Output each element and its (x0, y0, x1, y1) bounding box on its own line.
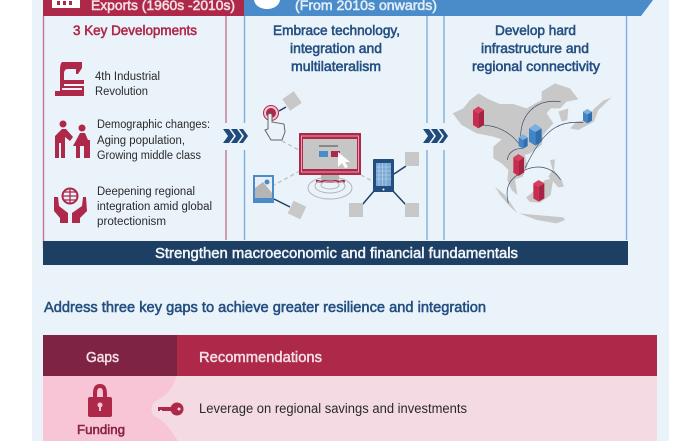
banner: strengthen fundamentals (43, 241, 628, 265)
table header: recommendations (177, 335, 657, 376)
icon: padlock (88, 384, 112, 417)
heading: develop hard infrastructure (472, 22, 600, 74)
text: leverage recommendation: Leverage on regional savings and investments (199, 401, 467, 416)
tablet (373, 159, 394, 192)
icon: industrial robot machine (55, 62, 84, 96)
panel: exports era header (43, 0, 244, 16)
text: funding label: Funding (77, 422, 125, 437)
text: 4th industrial revolution: 4th Industrial (95, 71, 160, 83)
text: deepening regional integration: Deepening regional (97, 186, 195, 198)
heading: embrace technology: Embrace technology, (273, 22, 400, 38)
text: demographic changes (97, 119, 210, 162)
text: deepening regional integration: protectionism (97, 216, 166, 228)
heading: 3 key developments: 3 Key Developments (73, 22, 197, 38)
text: 4th industrial revolution (95, 71, 160, 98)
heading: develop hard infrastructure: regional connectivity (472, 58, 600, 74)
text: demographic changes: Demographic changes: (97, 119, 210, 131)
heading: develop hard infrastructure: Develop hard (495, 22, 576, 38)
icon: key (158, 402, 184, 416)
panel: from 2010s header (244, 0, 653, 16)
text: deepening regional integration: integration amid global (97, 201, 212, 213)
arrow: chevrons to technology (223, 129, 248, 143)
table header: gaps: Gaps (86, 350, 119, 366)
row: funding gap cell (43, 376, 178, 441)
text: demographic changes: Growing middle class (97, 150, 201, 162)
heading: embrace technology: integration and (290, 40, 382, 56)
table header: gaps (43, 335, 177, 376)
heading: embrace technology (273, 22, 400, 74)
illustration: technology network (253, 91, 419, 219)
text: 4th industrial revolution: Revolution (95, 86, 148, 98)
table header: recommendations: Recommendations (199, 350, 322, 366)
icon: elderly couple (55, 120, 90, 158)
heading: embrace technology: multilateralism (291, 58, 381, 74)
banner: strengthen fundamentals: Strengthen macroeconomic and financial fundamentals (155, 246, 518, 262)
row: funding recommendation background (43, 376, 657, 441)
map: asia connectivity (453, 83, 612, 223)
photo (253, 175, 274, 203)
text: demographic changes: Aging population, (97, 135, 185, 147)
icon: hands holding globe (54, 188, 87, 223)
cubes (473, 106, 484, 113)
heading: develop hard infrastructure: infrastructure and (481, 40, 589, 56)
text: deepening regional integration (97, 186, 212, 228)
column dividers (44, 16, 626, 248)
heading: three key gaps: Address three key gaps to achieve greater resilience and integration (44, 299, 486, 316)
monitor (299, 133, 361, 175)
arrow: chevrons to infrastructure (423, 129, 448, 143)
